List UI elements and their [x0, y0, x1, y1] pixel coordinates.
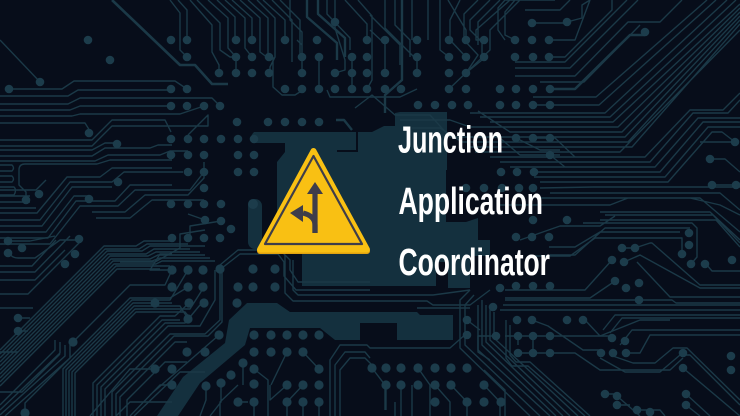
- title line: Junction: Junction: [398, 120, 503, 162]
- lower-left diagonal bundle: [0, 241, 215, 386]
- top vertical traces: [170, 0, 303, 95]
- title: Junction Application Coordinator: [398, 120, 550, 284]
- outline traces around the chip: [285, 255, 490, 416]
- title line: Coordinator: Coordinator: [398, 242, 550, 284]
- icon: branching arrows: [290, 182, 323, 233]
- circuit pads: central chip and lower band: [157, 112, 490, 416]
- lower-right bundles: [505, 212, 740, 298]
- icon: yellow road junction warning sign: [260, 151, 367, 251]
- right diagonal bundles: [515, 0, 682, 82]
- title line: Application: Application: [398, 181, 543, 223]
